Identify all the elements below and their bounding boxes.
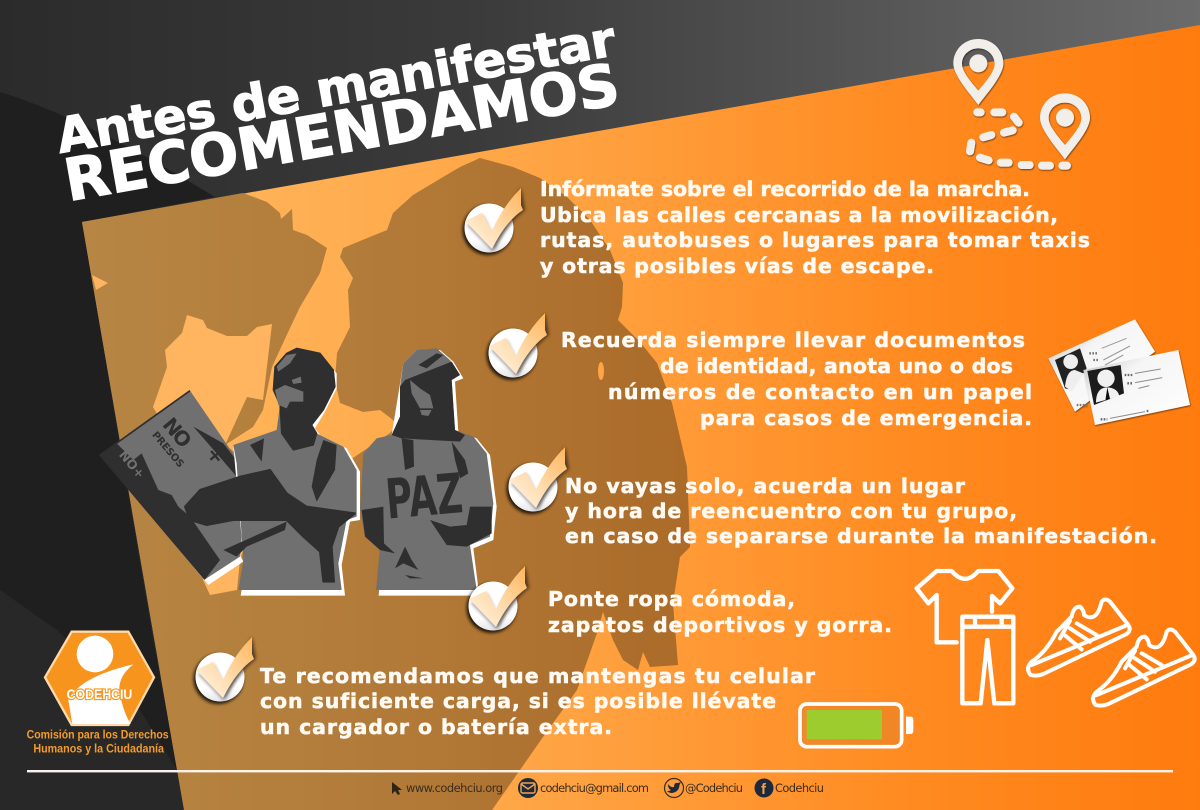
icon: battery	[800, 704, 913, 747]
tip 1 text: y otras posibles vías de escape.	[540, 254, 934, 278]
tip 4 text	[548, 587, 892, 637]
tip 5 text	[260, 664, 816, 739]
tip 2 text: de identidad, anota uno o dos	[660, 354, 1013, 378]
twitter: @Codehciu	[685, 781, 743, 795]
tip 3 text	[565, 474, 1157, 548]
tip 5: phone battery	[194, 637, 816, 739]
facebook	[754, 778, 824, 798]
brown protester silhouettes	[82, 158, 690, 810]
website: www.codehciu.org	[406, 781, 503, 795]
icon: route pins	[953, 39, 1090, 166]
tip 3 text: y hora de reencuentro con tu grupo,	[565, 499, 1017, 523]
check icon 1	[462, 188, 525, 255]
tip 4 text: zapatos deportivos y gorra.	[548, 613, 892, 637]
tip 2 text	[561, 328, 1032, 430]
logo: CODEHCIU	[27, 632, 169, 756]
check icon 4	[466, 566, 529, 633]
tip 1 text: Ubica las calles cercanas a la movilización,	[540, 203, 1058, 227]
check icon 3	[506, 447, 569, 514]
man figure	[185, 348, 360, 596]
email: codehciu@gmail.com	[540, 781, 649, 795]
tip 1: march route	[462, 177, 1090, 278]
logo: CODEHCIU: Humanos y la Ciudadanía	[33, 743, 164, 756]
tip 1 text	[540, 177, 1090, 278]
title: RECOMENDAMOS	[59, 50, 624, 215]
poster card: NO+	[116, 447, 148, 481]
poster card: NO	[158, 413, 197, 452]
tip 5 text: un cargador o batería extra.	[260, 715, 612, 739]
woman figure: PAZ	[383, 461, 465, 532]
back card	[1048, 319, 1155, 412]
photo cut-out: two protesters with poster	[100, 348, 497, 596]
tip 5 text: Te recomendamos que mantengas tu celular	[260, 664, 816, 688]
logo: CODEHCIU: Comisión para los Derechos	[27, 728, 169, 741]
logo: CODEHCIU: CODEHCIU	[67, 686, 132, 702]
tip 4 text: Ponte ropa cómoda,	[548, 587, 795, 611]
tip 3: do not go alone	[506, 447, 1157, 548]
twitter	[664, 778, 743, 798]
front card	[1083, 350, 1190, 425]
check icon 2	[486, 313, 549, 380]
icon: sneakers	[1028, 599, 1195, 706]
tip 5 text: con suficiente carga, si es posible llévate	[260, 689, 776, 713]
title: Antes de manifestar	[52, 11, 620, 165]
tip 3 text: en caso de separarse durante la manifestación.	[565, 524, 1157, 548]
woman figure	[360, 348, 497, 596]
email	[518, 778, 649, 798]
poster card: +	[201, 441, 230, 469]
facebook: f	[761, 781, 767, 798]
tip 1 text: rutas, autobuses o lugares para tomar taxis	[540, 228, 1090, 252]
icon: ID cards	[1048, 319, 1190, 425]
tip 2 text: Recuerda siempre llevar documentos	[561, 328, 1025, 352]
tip 2 text: para casos de emergencia.	[700, 406, 1032, 430]
tip 4: comfortable clothes	[466, 566, 892, 637]
tip 2 text: números de contacto en un papel	[608, 380, 1032, 404]
footer divider	[27, 770, 1173, 772]
tip 1 text: Infórmate sobre el recorrido de la marcha.	[540, 177, 1030, 201]
icon: t-shirt and trousers	[917, 571, 1013, 703]
poster card	[100, 391, 247, 585]
tip 3 text: No vayas solo, acuerda un lugar	[565, 474, 966, 498]
check icon 5	[194, 637, 256, 704]
right sneaker	[1093, 629, 1195, 706]
poster card: PRESOS	[149, 430, 186, 470]
facebook: Codehciu	[775, 781, 824, 795]
tip 2: identity documents	[486, 313, 1032, 430]
left sneaker	[1028, 599, 1130, 676]
footer: contact links	[392, 778, 824, 798]
